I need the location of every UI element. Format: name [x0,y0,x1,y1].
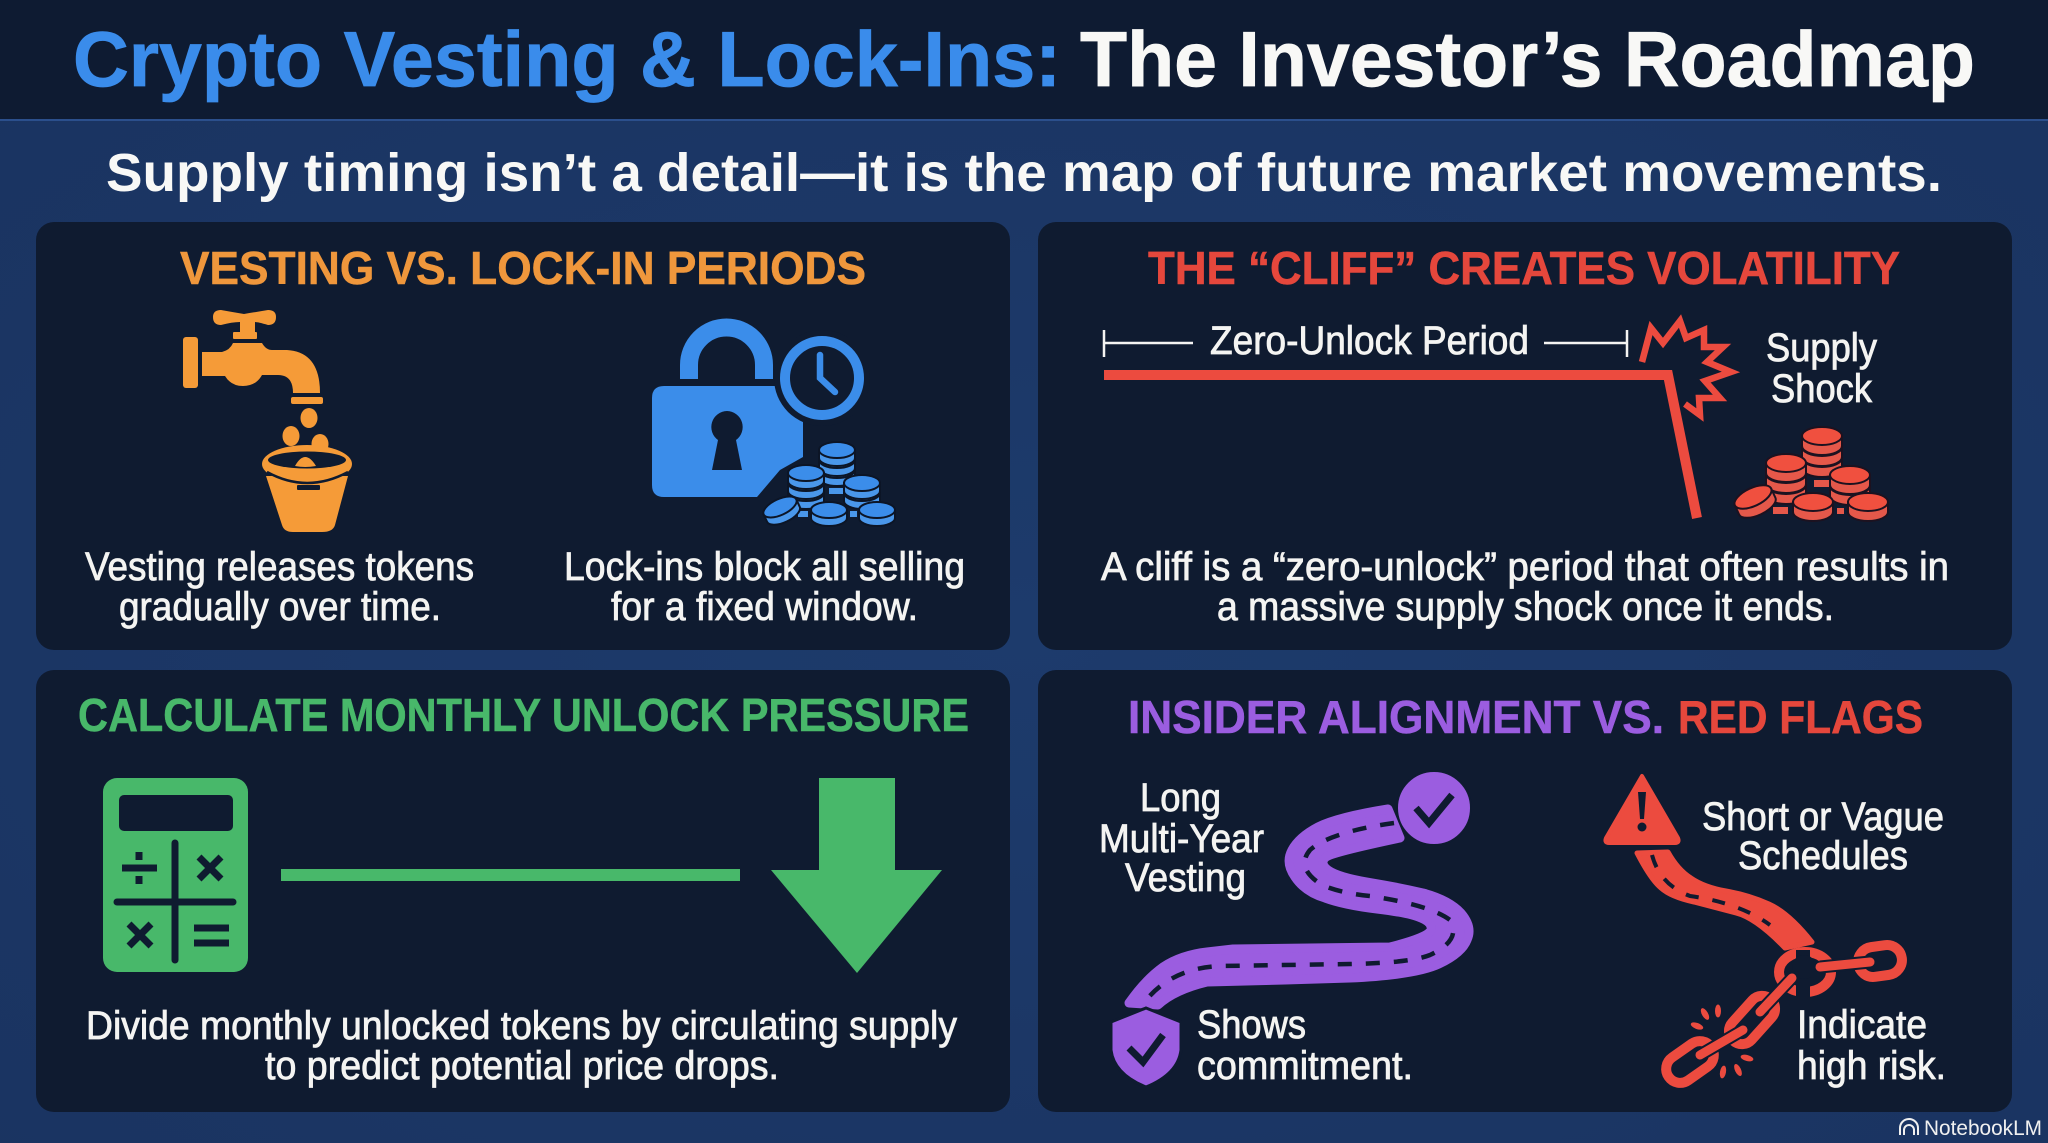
text: calculation formula: to predict potential price drops. [265,1044,779,1088]
title [73,15,1975,103]
zero-unlock period bracket: Zero-Unlock Period [1210,319,1529,363]
text: cliff definition [1101,545,1949,629]
icon: shield [1111,1008,1181,1087]
text: calculation formula [86,1004,957,1088]
panel: insider alignment vs red flags [1038,670,2012,1112]
text: vesting definition [85,545,474,629]
icon: burst [1642,321,1731,415]
label: supply shock: Supply [1766,326,1877,370]
heading: CALCULATE MONTHLY UNLOCK PRESSURE [78,689,969,741]
title: The Investor’s Roadmap [1080,15,1975,103]
icon: warning triangle [1605,776,1679,843]
text: calculation formula: Divide monthly unlocked tokens by circulating supply [86,1004,957,1048]
text: vesting definition: gradually over time. [119,585,441,629]
panel background [36,670,1010,1112]
label: short or vague schedules: Schedules [1738,834,1908,878]
label: long multi-year vesting: Long [1140,776,1221,820]
panel background [1038,670,2012,1112]
label: indicate high risk: high risk. [1797,1044,1946,1088]
label: long multi-year vesting: Multi-Year [1099,817,1264,861]
text: lock-in definition: for a fixed window. [611,585,918,629]
heading: INSIDER ALIGNMENT VS. [1128,691,1664,743]
text: cliff definition: A cliff is a “zero-unlock” period that often results in [1101,545,1949,589]
label: shows commitment: Shows [1197,1003,1306,1047]
title: Crypto Vesting & Lock-Ins: [73,15,1061,103]
label: indicate high risk [1797,1003,1946,1088]
zero-unlock period bracket [1104,319,1627,363]
icon: padlock, clock and coins [652,328,895,529]
label: shows commitment: commitment. [1197,1044,1413,1088]
label: long multi-year vesting [1099,776,1264,900]
icon: broken chain [1661,943,1904,1088]
heading: RED FLAGS [1678,691,1923,743]
subtitle: Supply timing isn’t a detail—it is the map of future market movements. [106,143,1942,203]
label: supply shock [1766,326,1877,411]
label: indicate high risk: Indicate [1797,1003,1927,1047]
heading: VESTING VS. LOCK-IN PERIODS [180,242,866,294]
winding purple road [1129,809,1469,1005]
label: long multi-year vesting: Vesting [1125,856,1246,900]
panel background [1038,222,2012,650]
label: short or vague schedules: Short or Vague [1702,795,1944,839]
panel: vesting vs lock-in [36,222,1010,650]
text: lock-in definition: Lock-ins block all selling [564,545,965,589]
icon: faucet and bucket [183,310,352,532]
icon: check badge [1397,771,1471,845]
arrow: price drop [771,778,942,973]
icon: red coins [1731,427,1888,523]
text: vesting definition: Vesting releases tokens [85,545,474,589]
fading red road [1637,852,1812,948]
panel: monthly unlock pressure [36,670,1010,1112]
text: lock-in definition [564,545,965,629]
cliff line chart [1104,375,1697,518]
watermark: NotebookLM: NotebookLM [1924,1117,2042,1140]
panel background [36,222,1010,650]
heading: THE “CLIFF” CREATES VOLATILITY [1148,242,1900,294]
icon: calculator [103,778,248,972]
label: short or vague schedules [1702,795,1944,878]
fraction bar [281,869,740,881]
label: supply shock: Shock [1771,367,1873,411]
panel: cliff creates volatility [1038,222,2012,650]
label: shows commitment [1197,1003,1413,1088]
text: cliff definition: a massive supply shock once it ends. [1217,585,1834,629]
header band [0,0,2048,120]
